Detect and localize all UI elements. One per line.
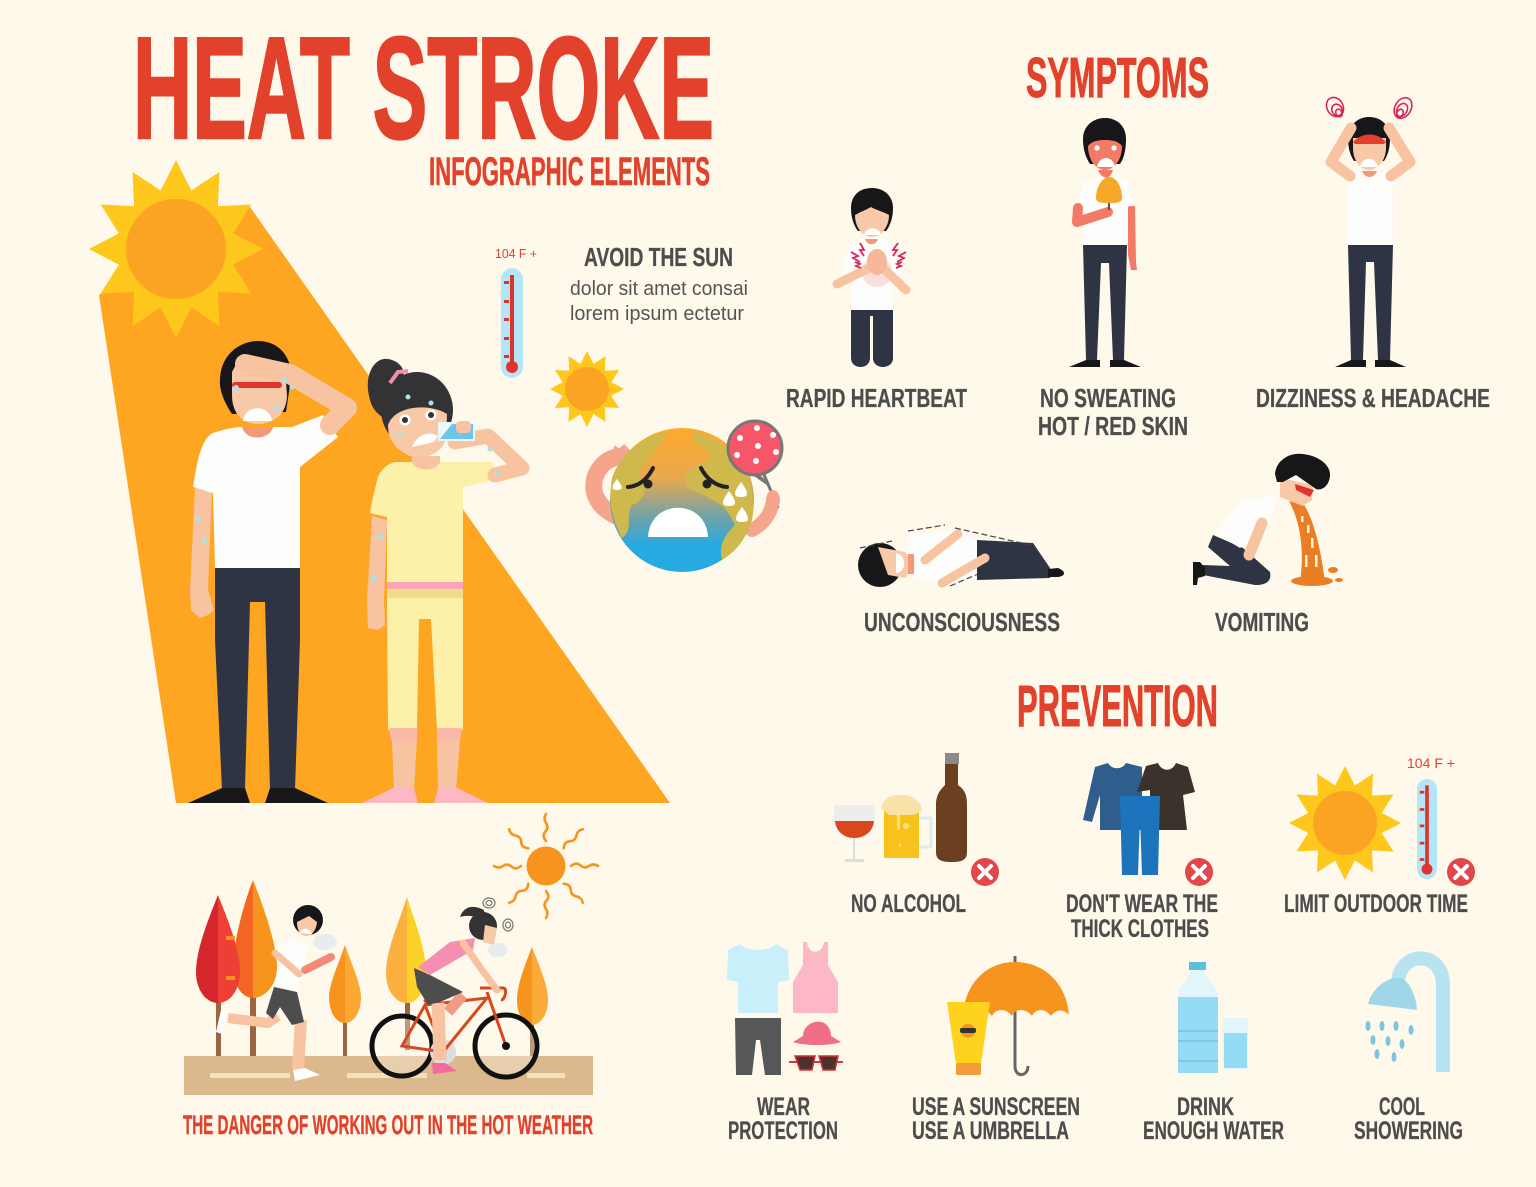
thermometer label: 104 F + — [495, 247, 537, 261]
runner: legs — [228, 1016, 278, 1023]
cyclist: front leg — [438, 1003, 440, 1060]
symptom figure: vomiting — [1193, 454, 1343, 586]
symptom label: RAPID HEARTBEAT — [786, 383, 967, 413]
earth: brows — [628, 468, 653, 487]
orange tree — [233, 880, 277, 998]
symptom label: HOT / RED SKIN — [1038, 411, 1188, 441]
icon: big sun — [89, 160, 263, 338]
prevention label: DON'T WEAR THE — [1066, 890, 1218, 918]
icon: thermometer — [1417, 779, 1437, 879]
cyclist and bike — [372, 898, 537, 1077]
water drops — [1366, 1021, 1414, 1062]
cyclist: breath — [488, 943, 508, 957]
vomit: face — [1280, 478, 1313, 506]
heartbeat: pants — [851, 310, 893, 367]
woman: neck — [412, 456, 440, 470]
avoid body line 1: dolor sit amet consai — [570, 278, 748, 300]
runner: shorts — [266, 987, 304, 1025]
cyclist: hair — [469, 912, 497, 940]
shower pipe — [1398, 958, 1443, 1072]
icon: small sun — [550, 351, 624, 427]
avoid body line 2: lorem ipsum ectetur — [570, 303, 744, 325]
earth: tears — [612, 479, 748, 522]
cyclist: shirt — [418, 938, 475, 975]
workout caption: THE DANGER OF WORKING OUT IN THE HOT WEATHER — [183, 1110, 593, 1140]
prevention label — [1354, 1093, 1463, 1145]
cyclist: back leg — [448, 995, 463, 1012]
dizziness: spirals — [1323, 94, 1415, 122]
jeans — [1120, 796, 1160, 875]
cyclist: shoe — [432, 1063, 457, 1074]
icon: sun — [1289, 766, 1401, 880]
wine bottle — [936, 763, 967, 862]
dark t-shirt — [1137, 763, 1195, 830]
unconscious: dashes — [860, 525, 1035, 586]
prevention label: SHOWERING — [1354, 1117, 1463, 1145]
earth: hand fan — [748, 470, 778, 508]
woman: left arm — [367, 516, 387, 630]
man holding forehead — [188, 341, 347, 803]
bottle top — [1178, 970, 1218, 998]
man: shoes — [188, 788, 328, 803]
woman: sweat drops — [371, 394, 500, 581]
woman: face — [388, 407, 447, 457]
icon: x badge — [1185, 858, 1213, 886]
bottle cap — [1189, 962, 1206, 970]
symptom figure: rapid heartbeat — [837, 188, 906, 367]
icon: x badge — [1447, 858, 1475, 886]
woman drinking water — [362, 359, 522, 803]
prevention heading: PREVENTION — [1017, 674, 1218, 739]
runner: shoes — [216, 1010, 228, 1034]
heartbeat: arms — [837, 266, 906, 290]
pink hat — [793, 1022, 841, 1045]
tree trunks — [216, 995, 534, 1056]
symptom figure: no sweating — [1069, 118, 1141, 367]
no sweating: pants — [1083, 245, 1127, 360]
symptom label: UNCONSCIOUSNESS — [864, 607, 1060, 637]
bike: chainring — [430, 1039, 456, 1065]
vomit: shoe — [1193, 562, 1205, 585]
grey shorts — [735, 1018, 781, 1075]
icon: x badge — [971, 858, 999, 886]
heartbeat: chest glow — [862, 257, 892, 287]
bottle water — [1178, 997, 1218, 1073]
runner: shirt — [273, 940, 308, 992]
man: sweat drops — [195, 377, 294, 543]
prevention label: USE A SUNSCREEN — [912, 1093, 1080, 1121]
unconscious: face — [878, 547, 915, 578]
vomit: arm — [1249, 523, 1262, 555]
dizziness: shoes — [1335, 360, 1406, 367]
vomit: pants — [1203, 535, 1270, 585]
woman: cuffs — [389, 728, 462, 741]
prevention label — [1143, 1093, 1284, 1145]
heartbeat: face — [855, 207, 889, 237]
dizziness: pants — [1348, 245, 1393, 360]
unconscious: pants — [977, 540, 1050, 580]
prevention label — [1066, 890, 1218, 943]
man: hair — [220, 341, 291, 414]
shower head — [1368, 978, 1417, 1010]
red tree — [196, 895, 240, 1003]
heartbeat: shirt — [840, 238, 904, 310]
prevention label: PROTECTION — [728, 1117, 838, 1145]
prevention label: DRINK — [1177, 1093, 1234, 1121]
man: neck — [242, 427, 273, 438]
woman: shoes — [362, 788, 488, 803]
heartbeat: pain marks — [851, 243, 906, 268]
earth: mouth — [648, 508, 708, 537]
woman: hair — [381, 372, 453, 448]
no sweating: shoes — [1069, 360, 1141, 367]
bike: wheels — [372, 1016, 432, 1076]
vomit: shirt — [1215, 495, 1277, 548]
icon: sweating earth — [594, 421, 782, 572]
light t-shirt — [727, 944, 789, 1013]
symptoms heading: SYMPTOMS — [1026, 46, 1209, 110]
vomit: stream — [1289, 501, 1325, 582]
dizziness: shirt — [1348, 172, 1393, 245]
no sweating: arm and fan — [1077, 208, 1108, 222]
prevention label: COOL — [1379, 1093, 1425, 1121]
woman: legs — [392, 740, 460, 790]
prevention label: WEAR — [757, 1093, 810, 1121]
icon: thick clothes — [1083, 763, 1195, 875]
no sweating: shirt — [1073, 177, 1134, 245]
woman: waist band — [387, 582, 463, 589]
bike: handlebar — [480, 988, 506, 1000]
icon: protective wear — [727, 942, 843, 1075]
woman: arm and glass — [455, 436, 522, 475]
runner: face — [297, 916, 317, 936]
dizziness: hair — [1348, 117, 1390, 161]
cyclist: face — [483, 925, 497, 945]
small orange tree — [329, 945, 361, 1023]
icon: thermometer — [501, 268, 523, 378]
man: raised arm — [245, 364, 347, 425]
sun beam — [99, 207, 670, 803]
man: shirt — [193, 415, 338, 568]
umbrella shaft — [1015, 956, 1028, 1075]
woman: shorts — [387, 596, 463, 730]
prevention label — [728, 1093, 838, 1145]
earth: right arm — [752, 505, 772, 530]
water glass — [1223, 1018, 1248, 1069]
woman: hair tie — [390, 371, 408, 383]
icon: no alcohol — [834, 753, 967, 862]
workout scene — [184, 814, 598, 1095]
sun with wavy rays — [494, 814, 598, 918]
prevention label: NO ALCOHOL — [851, 890, 966, 918]
woman: ponytail — [368, 359, 404, 418]
no sweating: right arm — [1128, 206, 1137, 270]
cyclist: dizzy marks — [483, 898, 513, 931]
vomit: hair — [1275, 454, 1330, 489]
prevention label — [912, 1093, 1080, 1145]
heartbeat: hair — [851, 188, 893, 231]
wine glass — [834, 805, 875, 840]
title: HEAT STROKE — [133, 7, 714, 169]
avoid heading: AVOID THE SUN — [584, 242, 733, 272]
dizziness: arms — [1331, 128, 1410, 176]
man: face — [232, 357, 287, 424]
woman: shirt — [370, 462, 495, 582]
earth: left arm — [594, 456, 622, 516]
right orange tree — [517, 947, 548, 1025]
pink tank top — [793, 942, 838, 1013]
icon: water bottle and glass — [1178, 962, 1248, 1073]
thermometer label: 104 F + — [1407, 755, 1455, 771]
dizziness: face — [1353, 138, 1386, 170]
icon: shower — [1366, 958, 1443, 1072]
cyclist: ponytail — [460, 907, 485, 918]
symptom label — [1038, 383, 1188, 441]
vomit: puddle — [1291, 576, 1333, 586]
unconscious: arms — [925, 534, 985, 583]
man: left arm — [190, 488, 214, 618]
no sweating: face — [1088, 140, 1122, 170]
prevention label: ENOUGH WATER — [1143, 1117, 1284, 1145]
unconscious: foot — [1048, 568, 1064, 577]
unconscious: hair — [858, 543, 902, 587]
symptom label: VOMITING — [1215, 607, 1309, 637]
cyclist: shorts — [414, 968, 463, 1005]
earth: land masses — [610, 432, 668, 538]
sunscreen tube — [947, 1002, 990, 1064]
runner: hair — [293, 905, 323, 935]
subtitle: INFOGRAPHIC ELEMENTS — [429, 150, 710, 194]
symptom label: NO SWEATING — [1040, 383, 1176, 413]
runner: arms — [275, 953, 299, 974]
prevention label: USE A UMBRELLA — [912, 1117, 1069, 1145]
blue sweater — [1083, 763, 1142, 830]
man: pants — [215, 568, 300, 790]
cyclist: arm — [463, 943, 497, 990]
road — [184, 1056, 593, 1095]
symptom figure: dizziness — [1323, 94, 1415, 367]
umbrella canopy — [963, 962, 1069, 1016]
road markings — [210, 1073, 565, 1078]
runner — [216, 905, 337, 1081]
icon: sunscreen and umbrella — [947, 956, 1069, 1075]
unconscious: shirt — [907, 530, 977, 586]
no sweating: hair — [1083, 118, 1126, 164]
earth: globe — [610, 428, 754, 572]
beer mug — [919, 818, 931, 847]
sunglasses — [789, 1061, 843, 1063]
symptom figure: unconsciousness — [858, 525, 1064, 587]
bike: frame — [402, 992, 506, 1052]
runner: breath — [313, 934, 337, 950]
yellow tree — [386, 897, 426, 1003]
prevention label: THICK CLOTHES — [1071, 915, 1209, 943]
avoid the sun text — [570, 242, 748, 325]
